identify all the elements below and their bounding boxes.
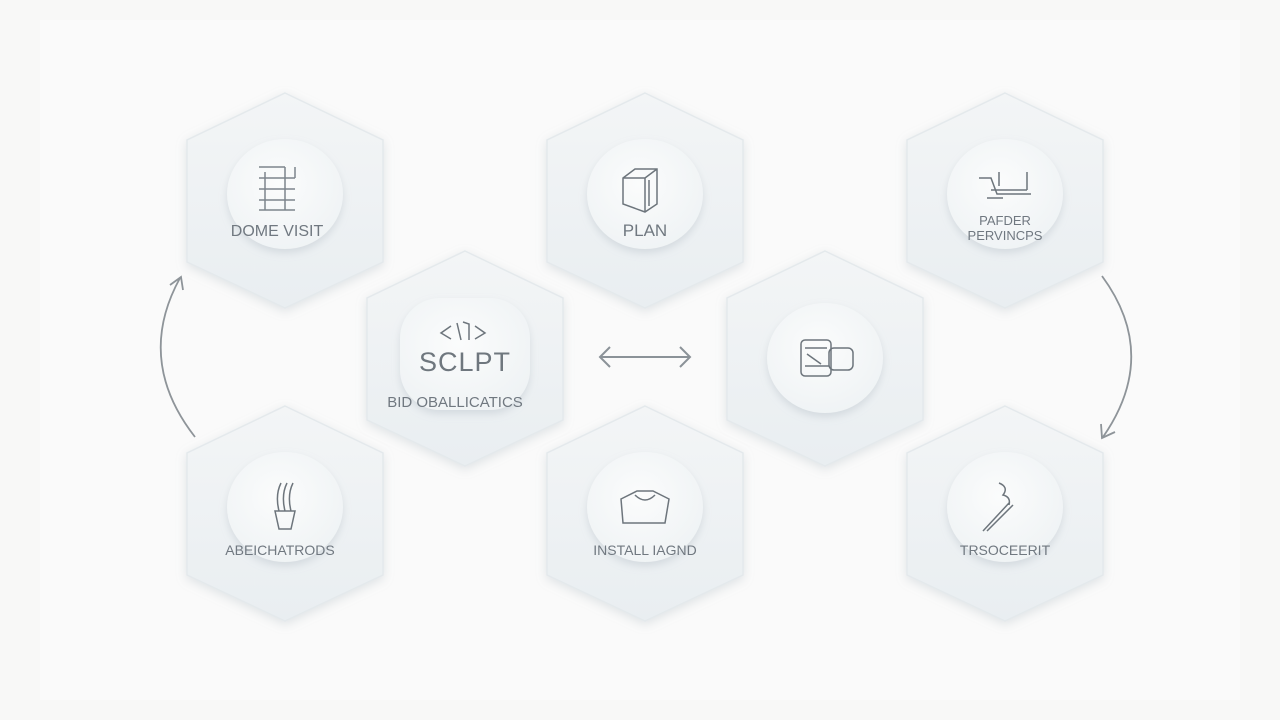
panel: install: INSTALL IAGND (593, 542, 697, 558)
panel: abeichatrods: ABEICHATRODS (225, 542, 335, 558)
icon: cup (275, 483, 295, 529)
panel: pafder pervincps: PERVINCPS (968, 228, 1043, 243)
panel: troceerit (907, 406, 1103, 621)
panel: plan (547, 93, 743, 308)
panel: plan: PLAN (623, 221, 667, 240)
label: DOME VISIT (231, 223, 323, 240)
panel: script: BID OBALLICATICS (387, 394, 523, 411)
icon: cart (979, 172, 1031, 198)
icon: tool (983, 483, 1013, 531)
panel: script: SCLPT (419, 347, 511, 377)
icon: bag (621, 491, 669, 523)
arrow: right curved (1101, 276, 1131, 438)
arrow: double (600, 347, 690, 367)
panel: pafder pervincps: PAFDER (979, 213, 1031, 228)
icon: shelves (259, 167, 295, 210)
panel: script (367, 251, 563, 466)
icon: devices (801, 340, 853, 376)
panel: device (727, 251, 923, 466)
panel: abeichatrods (187, 406, 383, 621)
icon: box (623, 169, 657, 212)
icon: code (441, 322, 485, 340)
panel: pafder pervincps (907, 93, 1103, 308)
panel: install (547, 406, 743, 621)
panel: dome visit (187, 93, 383, 308)
panel: troceerit: TRSOCEERIT (960, 542, 1051, 558)
arrow: left curved (161, 277, 195, 437)
